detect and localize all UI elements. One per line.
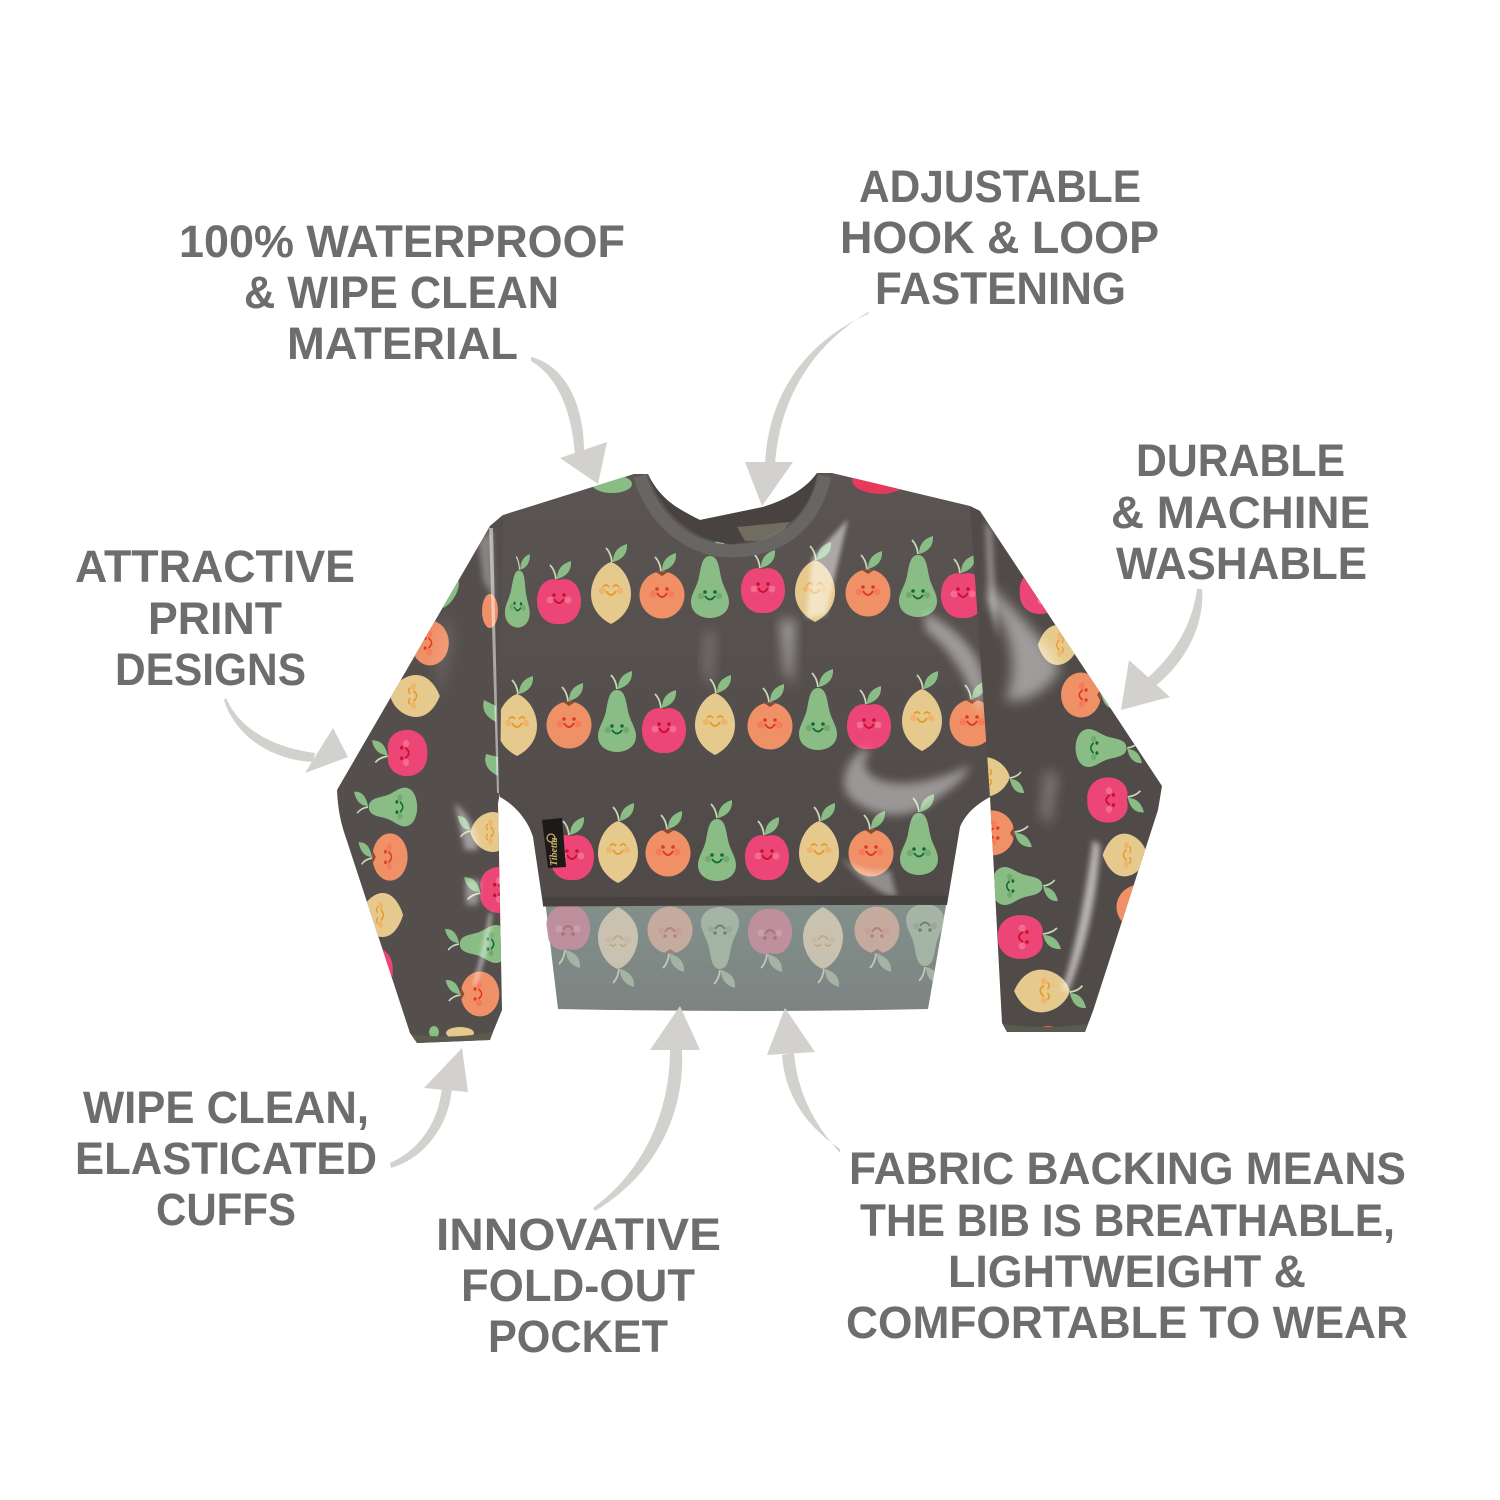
text block: fabric backing: FABRIC BACKING MEANS [849, 1143, 1406, 1194]
arrow: to waterproof material [531, 357, 607, 484]
text block: fastening: ADJUSTABLE [859, 161, 1141, 212]
right sleeve [970, 506, 1162, 1032]
arrow: to print designs [224, 698, 348, 773]
pocket seam [543, 900, 947, 902]
text block: fabric backing: LIGHTWEIGHT & [948, 1246, 1306, 1297]
text block: durable: WASHABLE [1116, 538, 1367, 589]
text block: print designs: ATTRACTIVE [75, 541, 355, 592]
arrow: to durable sleeve [1121, 589, 1202, 710]
arrow: to fold-out pocket [593, 1006, 700, 1211]
text block: fabric backing [846, 1143, 1408, 1348]
text block: fabric backing: THE BIB IS BREATHABLE, [860, 1195, 1395, 1246]
text block: fastening [840, 161, 1159, 314]
pocket panel [545, 900, 947, 1011]
label tag: Tibetta [549, 837, 560, 866]
text block: cuffs: CUFFS [156, 1184, 296, 1235]
text block: pocket: INNOVATIVE [436, 1209, 721, 1260]
text block: print designs [75, 541, 355, 695]
text block: print designs: DESIGNS [115, 644, 306, 695]
text block: durable: DURABLE [1136, 435, 1345, 486]
arrow: to cuffs [390, 1048, 468, 1168]
text block: durable: & MACHINE [1111, 487, 1370, 538]
text block: pocket: FOLD-OUT [461, 1260, 695, 1311]
text block: durable [1111, 435, 1370, 589]
text block: cuffs: ELASTICATED [75, 1133, 377, 1184]
bib body [490, 466, 994, 905]
text block: fastening: HOOK & LOOP [840, 212, 1159, 263]
collar trim [640, 476, 825, 551]
text block: fastening: FASTENING [875, 263, 1126, 314]
text block: cuffs: WIPE CLEAN, [83, 1082, 369, 1133]
left sleeve [337, 515, 503, 1043]
neck inner back [648, 473, 817, 544]
arrow: to fabric backing [767, 1008, 840, 1153]
title: bib photo [336, 466, 1182, 1043]
text block: waterproof: 100% WATERPROOF [179, 216, 625, 267]
label tag [542, 818, 566, 868]
text block: fabric backing: COMFORTABLE TO WEAR [846, 1297, 1408, 1348]
text block: waterproof: MATERIAL [287, 318, 518, 369]
text block: cuffs [75, 1082, 377, 1235]
text block: waterproof: & WIPE CLEAN [244, 267, 559, 318]
arrow: to hook and loop fastening [745, 311, 870, 506]
text block: pocket: POCKET [488, 1311, 668, 1362]
text block: pocket [436, 1209, 721, 1362]
text block: waterproof [179, 216, 625, 369]
text block: print designs: PRINT [148, 593, 282, 644]
